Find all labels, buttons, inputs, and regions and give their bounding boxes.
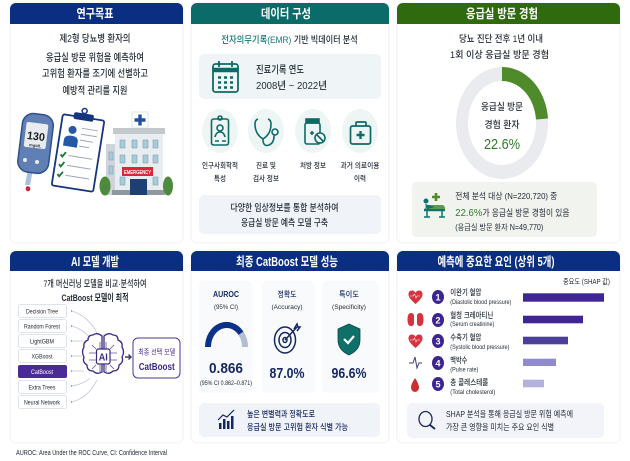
icon: stethoscope: [248, 109, 284, 183]
text block: demographics label: 인구사회학적: [202, 160, 238, 170]
heading: emergency visits: 응급실 방문 경험: [466, 6, 538, 21]
callout: final model: CatBoost: [139, 362, 175, 373]
model list: Random Forest: [24, 324, 60, 330]
icon: AI brain: AI: [99, 352, 108, 364]
card: accuracy: (Accuracy): [272, 304, 302, 311]
text block: goal description: 응급실 방문 위험을 예측하여: [46, 51, 144, 64]
card: accuracy: [262, 281, 315, 393]
heading: CatBoost performance: [191, 251, 389, 271]
text block: analysis summary: 전체 분석 대상 (N=220,720) 중: [455, 191, 557, 201]
panel: research goal: [10, 3, 183, 243]
icon: glucose meter: [17, 112, 55, 191]
text block: prior care label: [340, 160, 380, 183]
text block: record years: 2008년 ~ 2022년: [256, 80, 327, 92]
text block: model comparison: 7개 머신러닝 모델을 비교·분석하여: [44, 278, 146, 290]
icon: glucose meter: mg/dL: [29, 142, 42, 149]
text block: analysis summary: (응급실 방문 환자 N=49,770): [455, 222, 544, 232]
text block: demographics label: 특성: [214, 173, 226, 183]
text block: EMR subtitle: 전자의무기록(EMR): [221, 34, 291, 46]
panel: top factors: [397, 251, 620, 443]
heading: AI model development: [10, 251, 183, 271]
text block: examination label: 진료 및: [256, 160, 276, 170]
text block: record years: [256, 63, 327, 92]
text block: record years: 진료기록 연도: [256, 63, 304, 76]
icon: target: [274, 324, 300, 353]
callout: SHAP summary: [407, 403, 604, 438]
heading: top factors: [397, 251, 620, 271]
icon: calendar: [213, 61, 238, 92]
arrows: models to AI: [71, 311, 97, 402]
axis label: SHAP: 중요도 (SHAP 값): [563, 277, 610, 286]
card: AUROC: (95% CI): [214, 304, 238, 311]
factor 2: (Serum creatinine): [450, 322, 494, 328]
panel: data composition: [191, 3, 389, 243]
model list: CatBoost: [31, 369, 53, 376]
factor 3: (Systolic blood pressure): [450, 345, 509, 351]
factor 3: [408, 332, 568, 351]
callout: data summary: [199, 195, 381, 234]
callout: record years: [199, 54, 381, 99]
text block: EMR subtitle: [221, 34, 358, 46]
donut chart: 22.6%: 22.6%: [484, 136, 520, 153]
donut chart: 22.6%: [456, 67, 548, 179]
factor 5: 총 콜레스테롤: [450, 377, 488, 387]
icon: magnifier: [419, 412, 435, 429]
callout: performance summary: [199, 403, 380, 437]
card: AUROC: (95% CI 0.862–0.871): [200, 381, 252, 387]
text block: analysis summary: [455, 191, 570, 232]
text block: prior care label: 과거 의료이용: [340, 160, 380, 170]
text block: examination label: [253, 160, 279, 183]
text block: visit definition: 당뇨 진단 전후 1년 이내: [459, 33, 543, 45]
heading: emergency visits: [397, 3, 620, 24]
text block: prior care label: 이력: [354, 173, 366, 183]
text block: model comparison: [44, 278, 146, 304]
heading: CatBoost performance: 최종 CatBoost 모델 성능: [236, 255, 338, 269]
factor 5: 5: [435, 380, 441, 390]
model list: Decision Tree: [26, 308, 58, 316]
card: specificity: (Specificity): [332, 304, 366, 311]
text block: analysis summary: 가 응급실 방문 경험이 있음: [482, 207, 570, 218]
text block: visit definition: [450, 33, 549, 61]
callout: data summary: 다양한 임상정보를 통합 분석하여: [230, 202, 338, 214]
factor 5: [411, 377, 544, 396]
heading: AI model development: AI 모델 개발: [71, 255, 119, 269]
factor 1: 1: [435, 292, 441, 302]
model list: XGBoost: [32, 354, 53, 360]
donut chart: 22.6%: 응급실 방문: [481, 102, 523, 113]
callout: final model: [133, 338, 180, 378]
icon: hospital: [100, 112, 173, 196]
factor 1: 이완기 혈압: [450, 287, 482, 297]
heading: data composition: 데이터 구성: [261, 7, 311, 21]
factor 4: 4: [435, 358, 441, 368]
text block: performance summary: 높은 변별력과 정확도로: [247, 409, 315, 419]
icon: demographics: [202, 109, 238, 183]
card: specificity: 특이도: [339, 289, 359, 299]
text block: performance summary: 응급실 방문 고위험 환자 식별 가능: [247, 422, 348, 432]
model list: Neural Network: [24, 400, 61, 406]
text block: visit definition: 1회 이상 응급실 방문 경험: [450, 49, 549, 61]
card: AUROC: [199, 281, 253, 393]
icon: rising bar chart: [218, 410, 234, 429]
heading: research goal: [10, 3, 183, 24]
factor 2: 2: [435, 316, 441, 326]
model list: LightGBM: [30, 338, 54, 346]
icon: medical kit: [340, 109, 380, 183]
card: accuracy: 정확도: [278, 289, 296, 299]
icon: hospital: EMERGENCY: [124, 170, 151, 176]
donut chart: 22.6%: 경험 환자: [484, 119, 520, 131]
text block: model comparison: CatBoost 모델이 최적: [62, 292, 128, 304]
card: specificity: [322, 281, 379, 393]
callout: final model: 최종 선택 모델: [138, 346, 175, 356]
factor 3: 수축기 혈압: [450, 332, 482, 342]
text block: SHAP summary: 가장 큰 영향을 미치는 주요 요인 식별: [446, 422, 554, 432]
text block: demographics label: [202, 160, 238, 183]
text block: performance summary: [247, 409, 348, 432]
card: AUROC: 0.866: [209, 360, 243, 377]
text block: goal description: 예방적 관리를 지원: [62, 84, 128, 97]
panel: emergency visits: [397, 3, 620, 243]
panel: AI model development: [10, 251, 183, 443]
callout: analysis summary: [412, 182, 597, 237]
factor 4: 맥박수: [450, 355, 467, 365]
icon: glucose meter: 130: [26, 130, 46, 144]
arrow: to final model: [125, 354, 131, 360]
heading: top factors: 예측에 중요한 요인 (상위 5개): [438, 254, 554, 269]
factor 1: [408, 287, 604, 306]
icon: AI brain: [82, 334, 124, 373]
text block: goal description: 고위험 환자를 조기에 선별하고: [42, 67, 148, 80]
callout: data summary: 응급실 방문 예측 모델 구축: [241, 217, 328, 229]
model list: Extra Trees: [28, 384, 56, 392]
factor 4: [409, 355, 556, 374]
factor 4: (Pulse rate): [450, 368, 478, 374]
icon: shield: [338, 324, 360, 355]
card: specificity: 96.6%: [332, 365, 366, 382]
heading: data composition: [191, 3, 389, 24]
text block: SHAP summary: SHAP 분석을 통해 응급실 방문 위험 예측에: [446, 409, 573, 419]
factor 2: 혈청 크레아티닌: [450, 310, 493, 320]
text block: goal description: [42, 33, 148, 97]
text block: goal description: 제2형 당뇨병 환자의: [60, 33, 130, 45]
footnote: AUROC: Area Under the ROC Curve, CI: Confidence Interval: [16, 450, 167, 457]
factor 3: 3: [435, 336, 441, 346]
gauge: [208, 325, 245, 347]
text block: SHAP summary: [446, 409, 573, 432]
factor 2: [408, 310, 583, 328]
card: accuracy: 87.0%: [270, 365, 304, 382]
card: AUROC: AUROC: [213, 290, 239, 299]
text block: examination label: 검사 정보: [253, 173, 279, 183]
icon: prescription: [295, 109, 331, 170]
icon: patient on bed: [424, 193, 445, 217]
text block: prescription label: 처방 정보: [300, 160, 326, 170]
text block: analysis summary: 22.6%: [455, 207, 482, 219]
icon: clipboard checklist: [52, 105, 106, 192]
factor 1: (Diastolic blood pressure): [450, 300, 511, 306]
heading: research goal: 연구목표: [76, 7, 114, 21]
factor 5: (Total cholesterol): [450, 390, 495, 396]
text block: EMR subtitle: 기반 빅데이터 분석: [294, 34, 358, 46]
model list: [18, 304, 67, 408]
panel: CatBoost performance: [191, 251, 389, 443]
